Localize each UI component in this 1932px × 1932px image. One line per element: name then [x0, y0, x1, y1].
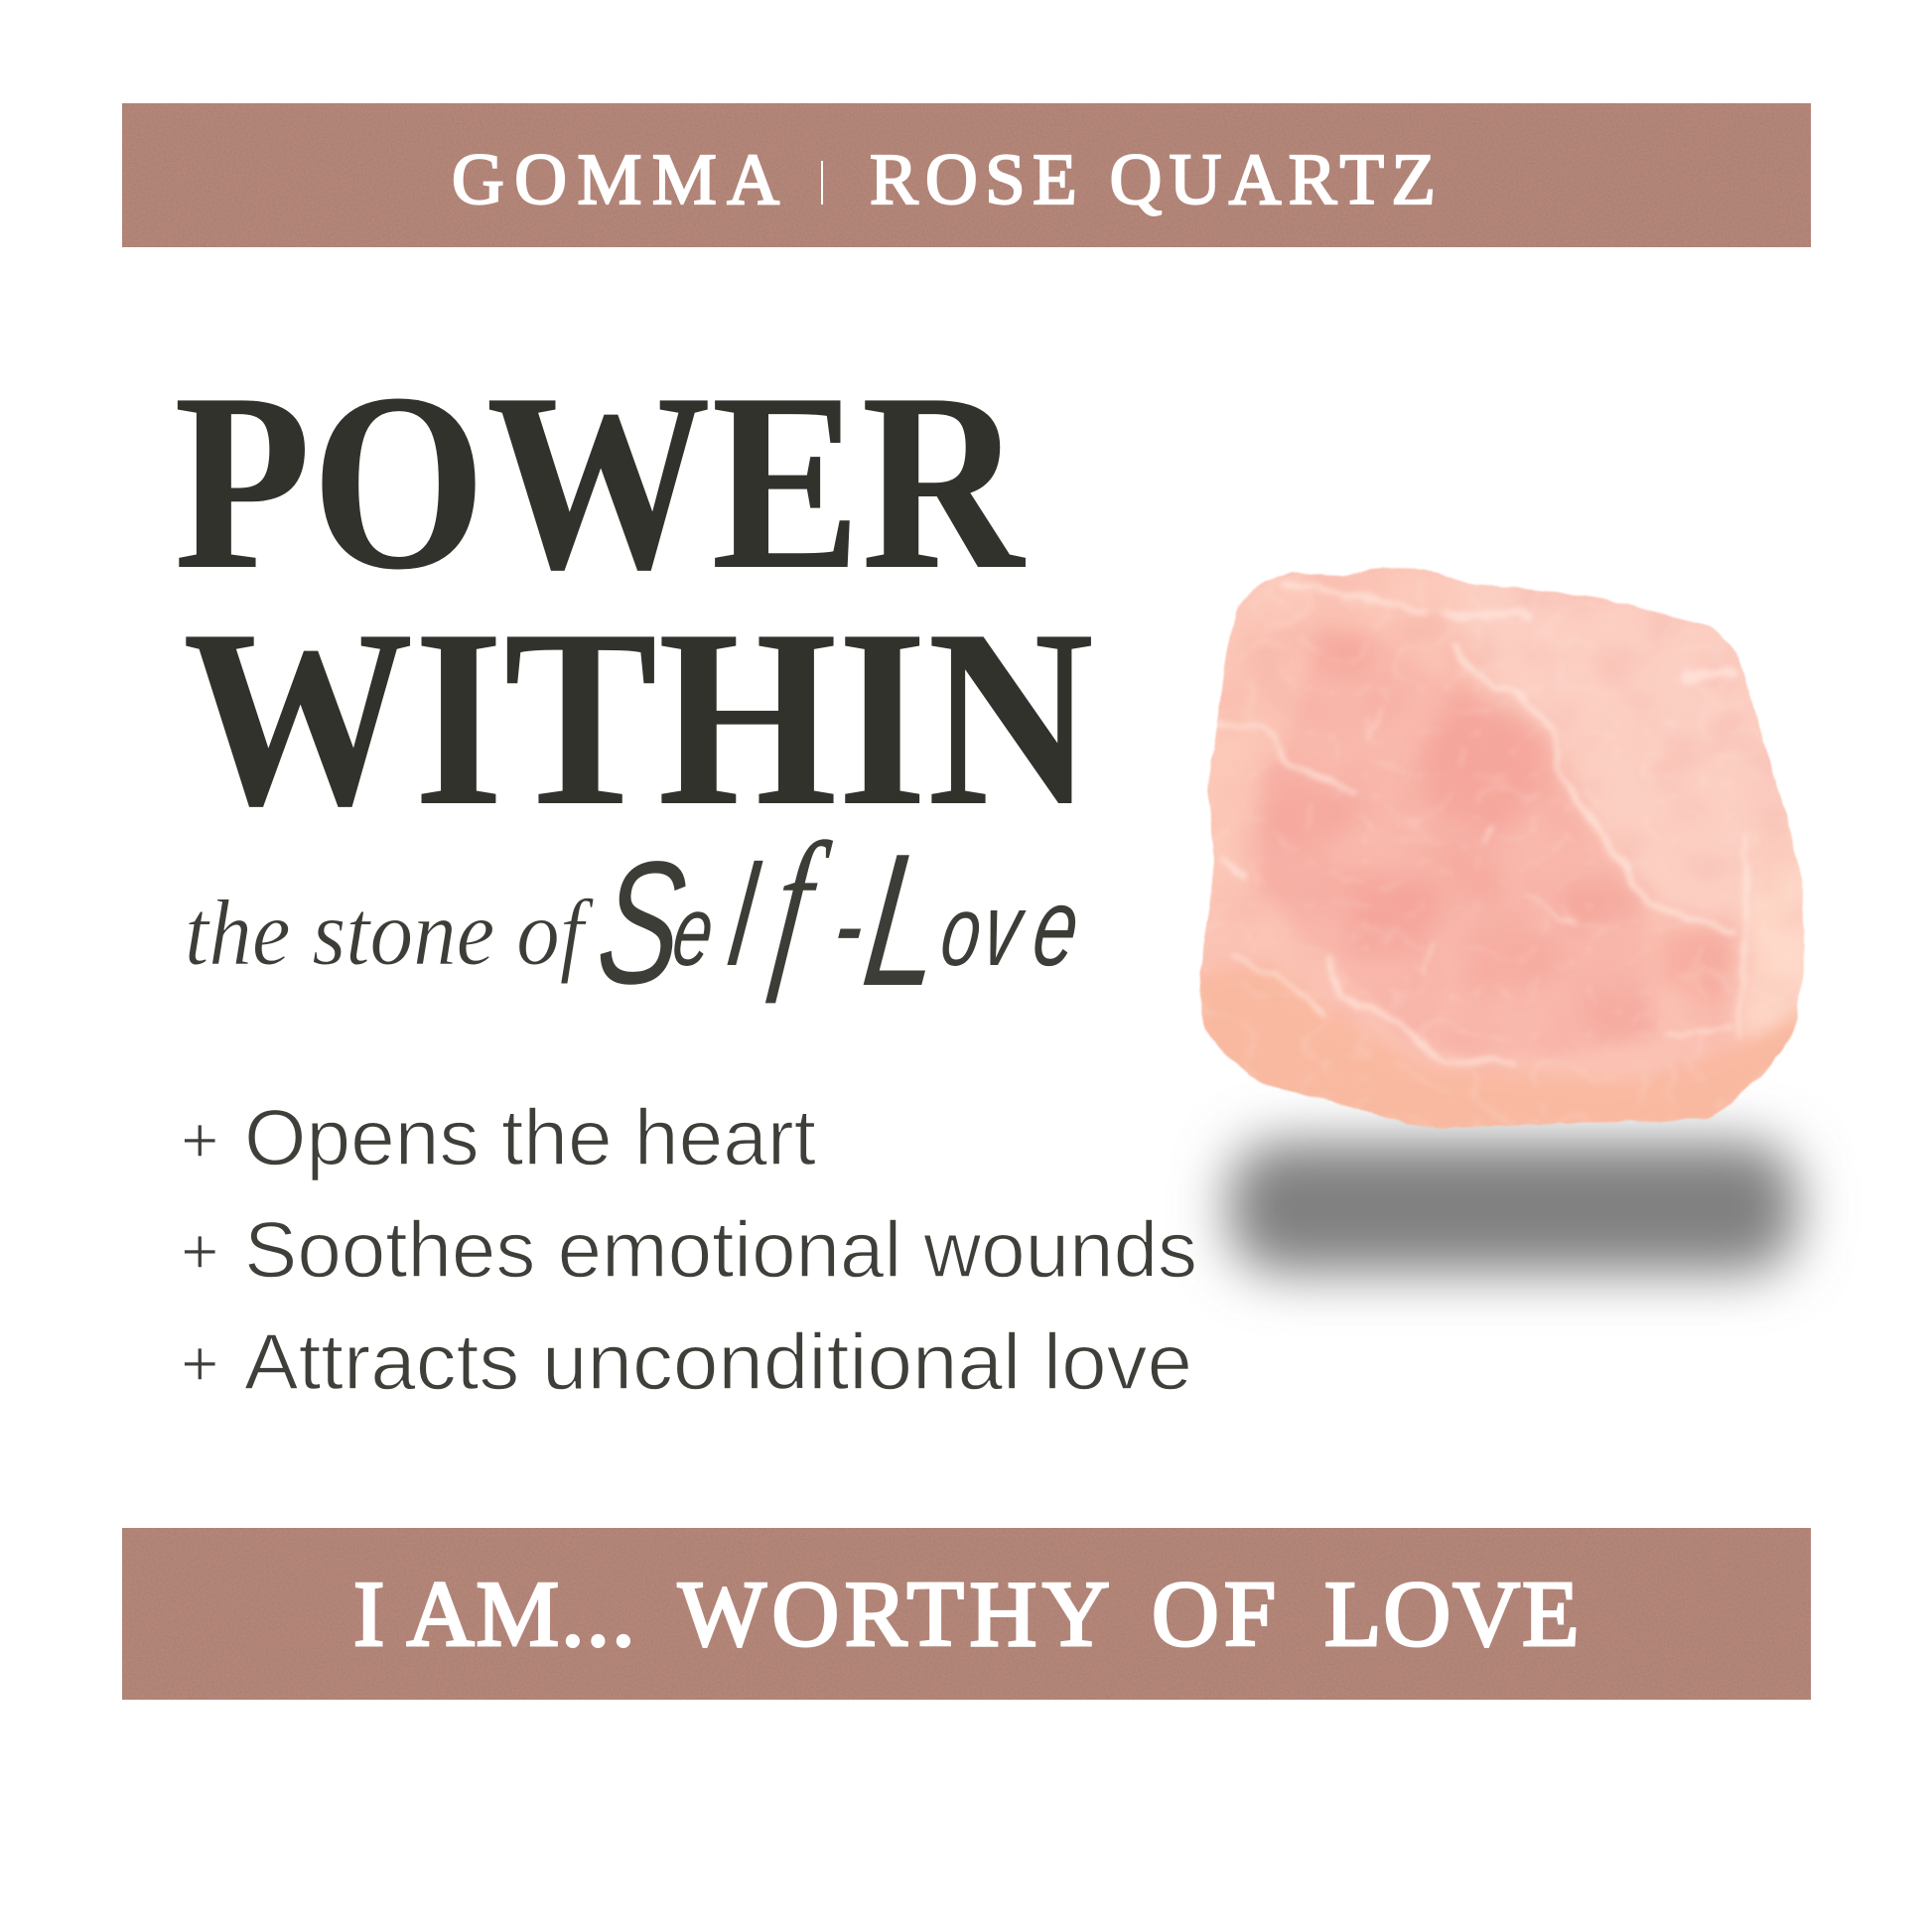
turbulence mottling [1252, 579, 1802, 1025]
benefit 1: + [181, 1103, 219, 1176]
subtitle: the stone of Self-Love: S [589, 826, 694, 1021]
lighter right and top facets [1456, 582, 1805, 1035]
warm lower-edge band [1187, 963, 1817, 1150]
affirmation text: I AM... [353, 1563, 637, 1666]
subtitle: the stone of Self-Love: L [855, 814, 954, 1025]
benefits list [181, 1093, 1197, 1406]
subtitle: the stone of Self-Love: - [827, 859, 872, 992]
main pale veins [1217, 584, 1746, 1061]
banner text: brand and stone name: GOMMA [452, 139, 779, 219]
affirmation text: LOVE [1324, 1563, 1582, 1666]
affirmation text: OF [1152, 1563, 1281, 1666]
darker pink facets [1263, 630, 1731, 1035]
subtitle: the stone of Self-Love: e [667, 876, 720, 987]
subtitle: the stone of Self-Love: l [722, 835, 766, 996]
benefit 2: Soothes emotional wounds [244, 1205, 1197, 1294]
banner text: brand and stone name: ROSE QUARTZ [870, 139, 1436, 219]
stone shadow [1229, 1142, 1797, 1273]
benefit 3: + [181, 1326, 219, 1400]
subtitle: the stone of Self-Love: the stone of [185, 882, 594, 985]
rose quartz stone [1199, 566, 1805, 1130]
heading: Power Within: POWER [174, 342, 1027, 622]
top banner [122, 103, 1811, 247]
fine marble veining [1182, 553, 1822, 1145]
subtitle: the stone of Self-Love: f [763, 806, 838, 1004]
affirmation text: WORTHY [678, 1563, 1115, 1666]
bottom affirmation banner [122, 1528, 1811, 1700]
subtitle: the stone of Self-Love: o [935, 876, 988, 987]
subtitle: the stone of Self-Love [185, 806, 1093, 1025]
heading: Power Within [174, 342, 1094, 859]
benefit 3: Attracts unconditional love [244, 1317, 1192, 1406]
benefit 2: + [181, 1214, 219, 1288]
subtitle: the stone of Self-Love: e [1027, 865, 1086, 989]
main darker pink face [1266, 645, 1644, 1052]
benefit 1: Opens the heart [244, 1093, 816, 1181]
heading: Power Within: WITHIN [183, 578, 1094, 859]
subtitle: the stone of Self-Love: v [977, 873, 1032, 988]
banner text: brand and stone name [452, 139, 1436, 219]
